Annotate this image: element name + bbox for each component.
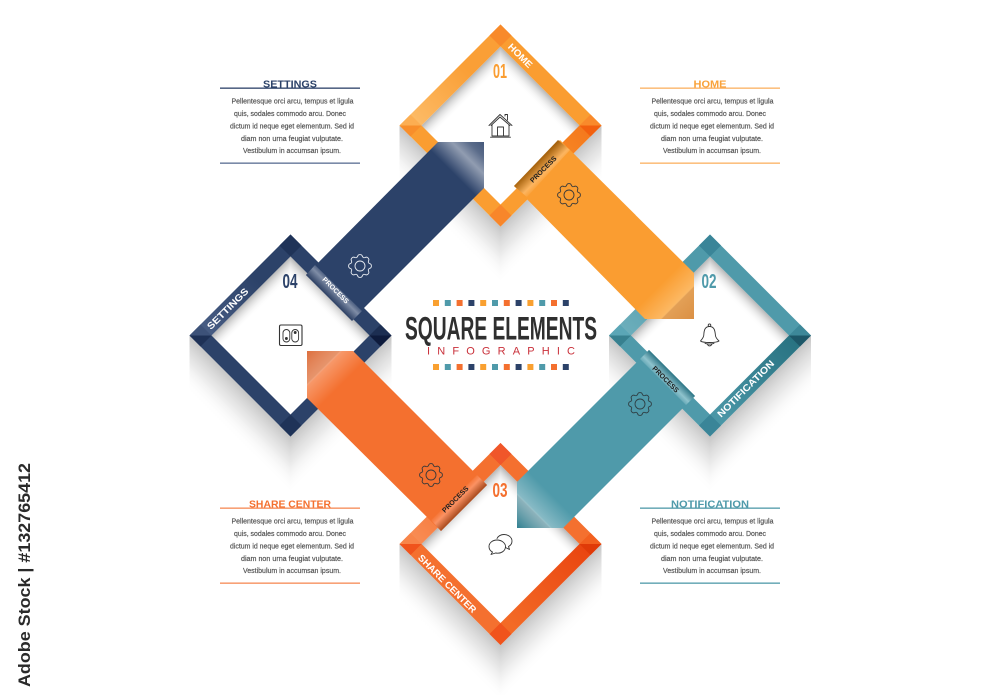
text block: home: Pellentesque orci arcu, tempus et ligula — [652, 96, 774, 106]
panel: 01 home diamond — [400, 24, 602, 226]
bottom row of coloured squares — [433, 364, 569, 370]
text block: share center: Vestibulum in accumsan ipsum. — [243, 566, 341, 575]
text block: notification: NOTIFICATION — [671, 498, 749, 510]
subheading: INFOGRAPHIC — [427, 346, 575, 358]
icon: house — [489, 114, 512, 137]
ribbon: teal, notification to share center — [517, 350, 695, 528]
text block: settings: Pellentesque orci arcu, tempus et ligula — [232, 96, 354, 106]
text block: home — [640, 78, 780, 164]
icon: chat bubbles — [489, 534, 512, 554]
process label, orange-red ribbon: PROCESS — [441, 485, 471, 515]
icon: gear, navy ribbon — [349, 255, 371, 277]
text block: notification: diam non urna feugiat vulputate. — [661, 554, 763, 563]
drop shadows under the diamonds — [190, 126, 811, 695]
icon: gear, teal ribbon — [629, 393, 651, 415]
text block: settings: diam non urna feugiat vulputate. — [241, 134, 343, 143]
ribbon: orange-red, share center to settings — [307, 351, 487, 531]
text block: notification: dictum id neque eget elementum. Sed id — [650, 542, 774, 550]
text block: home: HOME — [694, 78, 726, 90]
process label, orange ribbon: PROCESS — [529, 155, 559, 185]
number 02: 02 — [702, 271, 716, 293]
top row of coloured squares — [433, 300, 569, 306]
icon: gear, orange ribbon — [558, 184, 580, 206]
label: SETTINGS: SETTINGS — [205, 286, 251, 332]
text block: share center: Pellentesque orci arcu, tempus et ligula — [232, 516, 354, 526]
process label, teal ribbon: PROCESS — [650, 365, 680, 395]
panel: 04 settings diamond — [190, 234, 392, 436]
process label, navy ribbon: PROCESS — [320, 276, 350, 306]
text block: home: quis, sodales commodo arcu. Donec — [654, 109, 766, 118]
text block: settings: Vestibulum in accumsan ipsum. — [243, 146, 341, 155]
panel: 02 notification diamond — [609, 234, 811, 436]
text block: share center: quis, sodales commodo arcu. Donec — [234, 529, 346, 538]
panel: 03 share center diamond — [400, 443, 602, 645]
text block: settings — [220, 78, 360, 164]
text block: share center — [220, 498, 360, 584]
text block: notification — [640, 498, 780, 584]
text block: home: Vestibulum in accumsan ipsum. — [663, 146, 761, 155]
text block: settings: SETTINGS — [263, 78, 317, 90]
vertical image id caption: Adobe Stock | #132765412 — [15, 463, 34, 687]
number 01: 01 — [493, 61, 507, 83]
text block: home: diam non urna feugiat vulputate. — [661, 134, 763, 143]
label: SHARE CENTER: SHARE CENTER — [415, 553, 478, 616]
text block: settings: quis, sodales commodo arcu. Donec — [234, 109, 346, 118]
icon: bell — [700, 324, 719, 346]
number 03: 03 — [492, 480, 508, 502]
icon: switch plate — [280, 325, 302, 346]
text block: share center: diam non urna feugiat vulputate. — [241, 554, 343, 563]
text block: share center: SHARE CENTER — [249, 498, 331, 510]
text block: share center: dictum id neque eget elementum. Sed id — [230, 542, 354, 550]
text block: settings: dictum id neque eget elementum. Sed id — [230, 122, 354, 130]
icon: gear, orange-red ribbon — [420, 464, 442, 486]
ribbon: navy, settings to home — [306, 142, 484, 321]
text block: notification: Pellentesque orci arcu, tempus et ligula — [652, 516, 774, 526]
ribbon: orange, home to notification — [514, 140, 694, 319]
label: NOTIFICATION: NOTIFICATION — [715, 358, 777, 420]
centre title block — [405, 300, 597, 370]
label: HOME: HOME — [505, 42, 534, 71]
number 04: 04 — [282, 271, 298, 293]
text block: home: dictum id neque eget elementum. Sed id — [650, 122, 774, 130]
heading: SQUARE ELEMENTS — [405, 310, 597, 346]
text block: notification: quis, sodales commodo arcu. Donec — [654, 529, 766, 538]
text block: notification: Vestibulum in accumsan ipsum. — [663, 566, 761, 575]
